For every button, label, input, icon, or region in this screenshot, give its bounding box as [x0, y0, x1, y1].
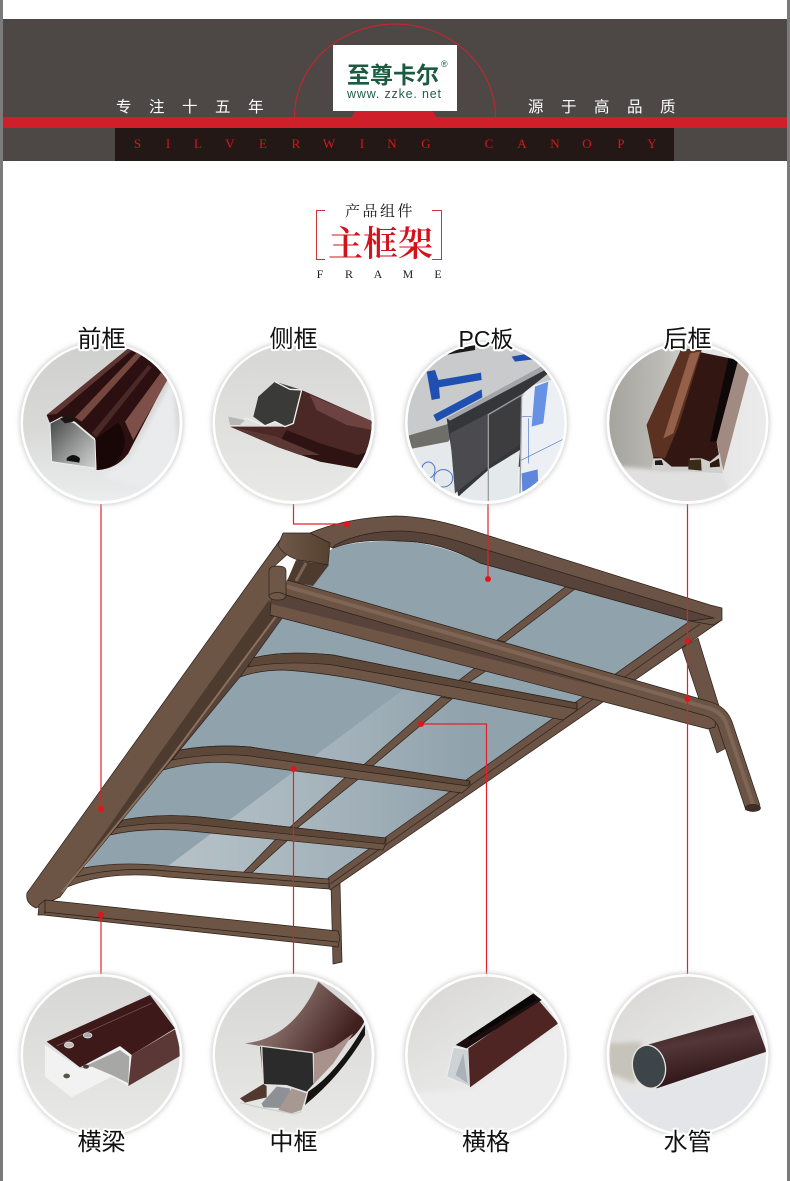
- front frame dark groove: [62, 600, 277, 892]
- part: 后框: [602, 326, 770, 510]
- cross bar 2: [163, 746, 470, 793]
- top rear rail: [310, 516, 722, 625]
- registered mark: ®: [441, 59, 448, 69]
- right bracket: [432, 210, 442, 260]
- support leg left: [331, 883, 342, 964]
- logo arc: [294, 24, 496, 117]
- slogan left: 专注十五年: [116, 95, 264, 117]
- part: PC板: [405, 326, 568, 505]
- right page edge: [787, 0, 790, 1181]
- eyebrow text: 产品组件: [345, 203, 413, 220]
- label: PC板: [459, 326, 513, 352]
- English subtitle: SILVERWINGCANOPY: [134, 136, 657, 151]
- canopy frame illustration: [27, 516, 760, 964]
- front frame ridge highlight: [62, 615, 277, 892]
- cross bar 4: [67, 864, 329, 889]
- polycarbonate glass: [83, 541, 692, 882]
- right rail: [328, 620, 722, 890]
- left bracket: [316, 210, 325, 260]
- support strut right: [682, 638, 732, 753]
- pipe end: [746, 804, 760, 812]
- red stripe: [3, 111, 787, 128]
- banner background: [3, 19, 787, 161]
- label: 侧框: [270, 326, 318, 353]
- part: 前框: [20, 326, 183, 505]
- front frame dark underside: [60, 612, 283, 895]
- main title: 主框架: [328, 217, 433, 267]
- cross bar 1: [240, 653, 577, 720]
- logo name: 至尊卡尔: [347, 62, 439, 88]
- corner block: [278, 533, 330, 565]
- rear water pipe: [285, 586, 754, 808]
- label: 横格: [462, 1129, 510, 1156]
- left page edge: [0, 0, 3, 1181]
- English title: FRAME: [317, 267, 442, 281]
- label: 后框: [664, 326, 712, 353]
- glass light reflection: [168, 683, 560, 885]
- slogan right: 源于高品质: [528, 95, 676, 117]
- label: 水管: [664, 1129, 712, 1156]
- rear box beam: [270, 592, 717, 729]
- logo URL: www. zzke. net: [346, 87, 442, 101]
- pipe opening: [632, 1044, 666, 1088]
- label: 横梁: [78, 1129, 126, 1156]
- cross bar 3: [110, 816, 386, 850]
- part: 侧框: [212, 326, 375, 505]
- part: 横梁: [20, 974, 183, 1156]
- part: 横格: [405, 974, 568, 1156]
- vertical pipe cap: [269, 566, 286, 600]
- leader lines: [101, 504, 688, 975]
- bottom cross beam: [38, 900, 340, 947]
- label: 前框: [78, 326, 126, 353]
- part: 中框: [212, 974, 375, 1156]
- label: 中框: [270, 1129, 318, 1156]
- section heading: [316, 203, 442, 281]
- dark corner inset: [287, 560, 329, 586]
- front frame: [27, 533, 290, 908]
- dark subtitle bar: [115, 128, 674, 161]
- header banner: [3, 19, 787, 161]
- marker dots: [98, 521, 690, 918]
- logo box: [333, 45, 457, 111]
- part: 水管: [606, 974, 770, 1156]
- longitudinal bars: [239, 584, 579, 878]
